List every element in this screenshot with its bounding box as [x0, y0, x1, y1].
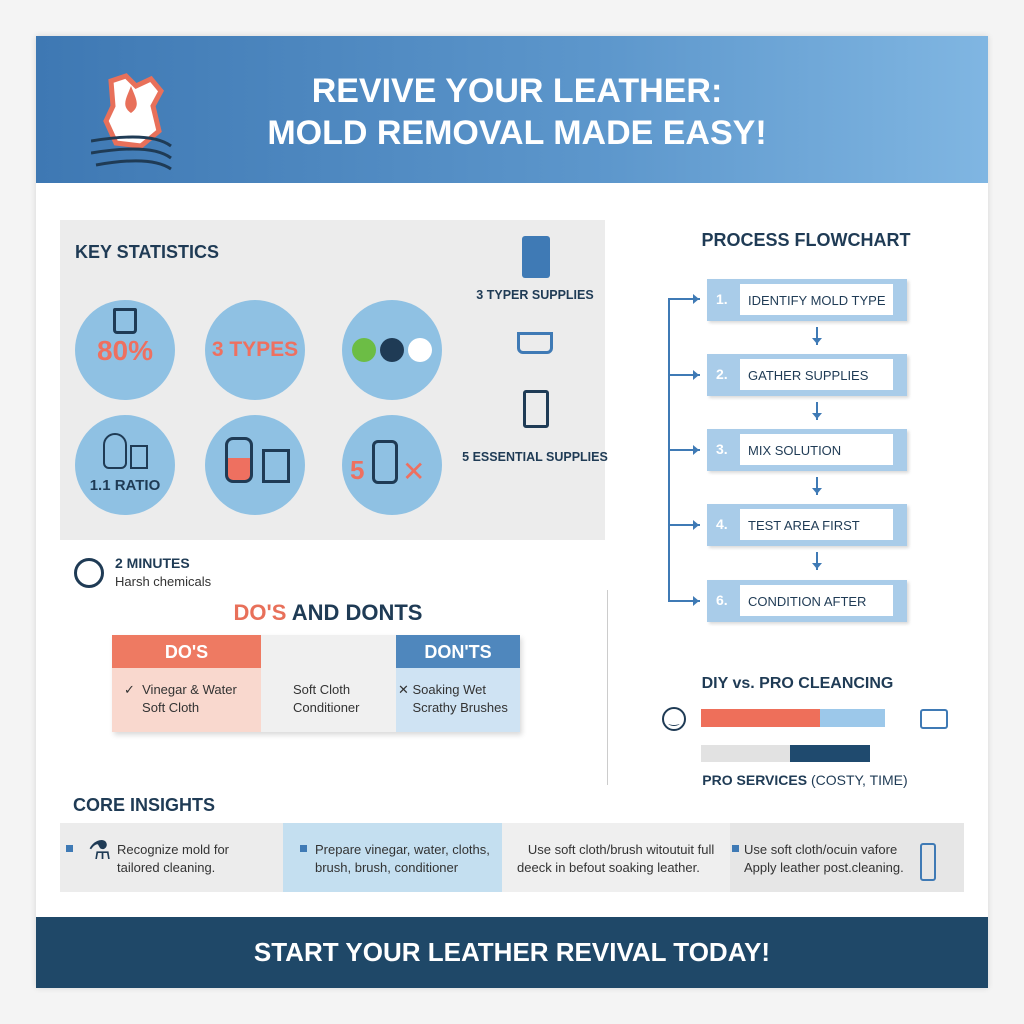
icon: basket — [517, 332, 553, 354]
insight 1: ⚗ — [88, 835, 111, 865]
DIY vs pro chart — [662, 675, 948, 788]
DIY vs pro chart: PRO SERVICES (COSTY, TIME) — [702, 772, 908, 788]
insight 4: Apply leather post.cleaning. — [744, 860, 904, 875]
insight 3 — [502, 823, 730, 892]
insight 3: Use soft cloth/brush witoutuit full — [528, 842, 714, 857]
step 3: 3. — [716, 441, 728, 457]
timer stat: 2 MINUTES — [115, 555, 190, 571]
step 3: MIX SOLUTION — [748, 443, 841, 458]
insight 2 — [283, 823, 502, 892]
footer banner: START YOUR LEATHER REVIVAL TODAY! — [254, 937, 770, 967]
step 2: 2. — [716, 366, 728, 382]
stat circle 80% — [75, 300, 175, 400]
insight 2: brush, brush, conditioner — [315, 860, 458, 875]
supplies column: 5 ESSENTIAL SUPPLIES — [462, 450, 608, 464]
do's and donts table: DO'S — [165, 642, 208, 662]
insight 1 — [60, 823, 283, 892]
core insights strip — [60, 823, 964, 892]
do's and donts table: Scrathy Brushes — [412, 700, 508, 715]
stat circle 3 types: 3 TYPES — [212, 338, 298, 361]
title — [267, 72, 767, 152]
do's and donts table: Conditioner — [293, 700, 360, 715]
timer stat — [74, 555, 211, 589]
icon: clipboard — [523, 390, 549, 428]
do's and donts table: Soft Cloth — [293, 682, 350, 697]
icon: wallet — [920, 709, 948, 729]
stat circle ratio: 1.1 RATIO — [90, 477, 160, 494]
stat circle 5 — [342, 415, 442, 515]
stat circle 5: 5 — [350, 455, 364, 485]
step 1: 1. — [716, 291, 728, 307]
footer banner — [36, 917, 988, 988]
do's and donts table: Soft Cloth — [142, 700, 199, 715]
header banner — [36, 36, 988, 183]
insight 2: Prepare vinegar, water, cloths, — [315, 842, 490, 857]
stat circle 80%: 80% — [97, 335, 153, 366]
heading: KEY STATISTICS — [75, 242, 219, 262]
timer stat: Harsh chemicals — [115, 574, 211, 589]
step 6 — [707, 580, 907, 622]
insight 4 — [730, 823, 964, 892]
do's and donts heading: DO'S AND DONTS — [234, 600, 422, 625]
flowchart — [668, 279, 908, 622]
step 4: 4. — [716, 516, 728, 532]
step 3 — [707, 429, 907, 471]
title: MOLD REMOVAL MADE EASY! — [267, 114, 767, 152]
flowchart heading: PROCESS FLOWCHART — [702, 230, 910, 250]
do's and donts table: ✕ Soaking Wet — [398, 682, 486, 697]
stat circle 3 types — [205, 300, 305, 400]
step 2 — [707, 354, 907, 396]
DIY vs pro chart: DIY vs. PRO CLEANCING — [702, 675, 893, 692]
step 6: CONDITION AFTER — [748, 594, 866, 609]
stat circle mold types — [342, 300, 442, 400]
insight 1: Recognize mold for — [117, 842, 229, 857]
step 6: 6. — [716, 592, 728, 608]
step 1 — [707, 279, 907, 321]
step 2: GATHER SUPPLIES — [748, 368, 868, 383]
do's and donts table: DON'TS — [424, 642, 492, 662]
step 4: TEST AREA FIRST — [748, 518, 860, 533]
insight 1: tailored cleaning. — [117, 860, 215, 875]
core insights heading: CORE INSIGHTS — [73, 795, 215, 815]
icon: smiley: ‿ — [669, 712, 679, 726]
panel: key statistics — [60, 220, 605, 540]
step 4 — [707, 504, 907, 546]
title: REVIVE YOUR LEATHER: — [312, 72, 722, 110]
insight 3: deeck in befout soaking leather. — [517, 860, 700, 875]
stat circle 5: ✕ — [402, 456, 425, 487]
icon: smiley — [662, 707, 686, 731]
stat circle ratio — [75, 415, 175, 515]
do's and donts table — [112, 635, 520, 732]
supplies column — [462, 236, 608, 464]
supplies column: 3 TYPER SUPPLIES — [476, 288, 594, 302]
insight 4: Use soft cloth/ocuin vafore — [744, 842, 897, 857]
icon: spray bottle — [522, 236, 550, 278]
do's and donts table: ✓ Vinegar & Water — [124, 682, 237, 697]
step 1: IDENTIFY MOLD TYPE — [748, 293, 886, 308]
icon: leather with drop — [91, 73, 172, 170]
stat circle bottles — [205, 415, 305, 515]
